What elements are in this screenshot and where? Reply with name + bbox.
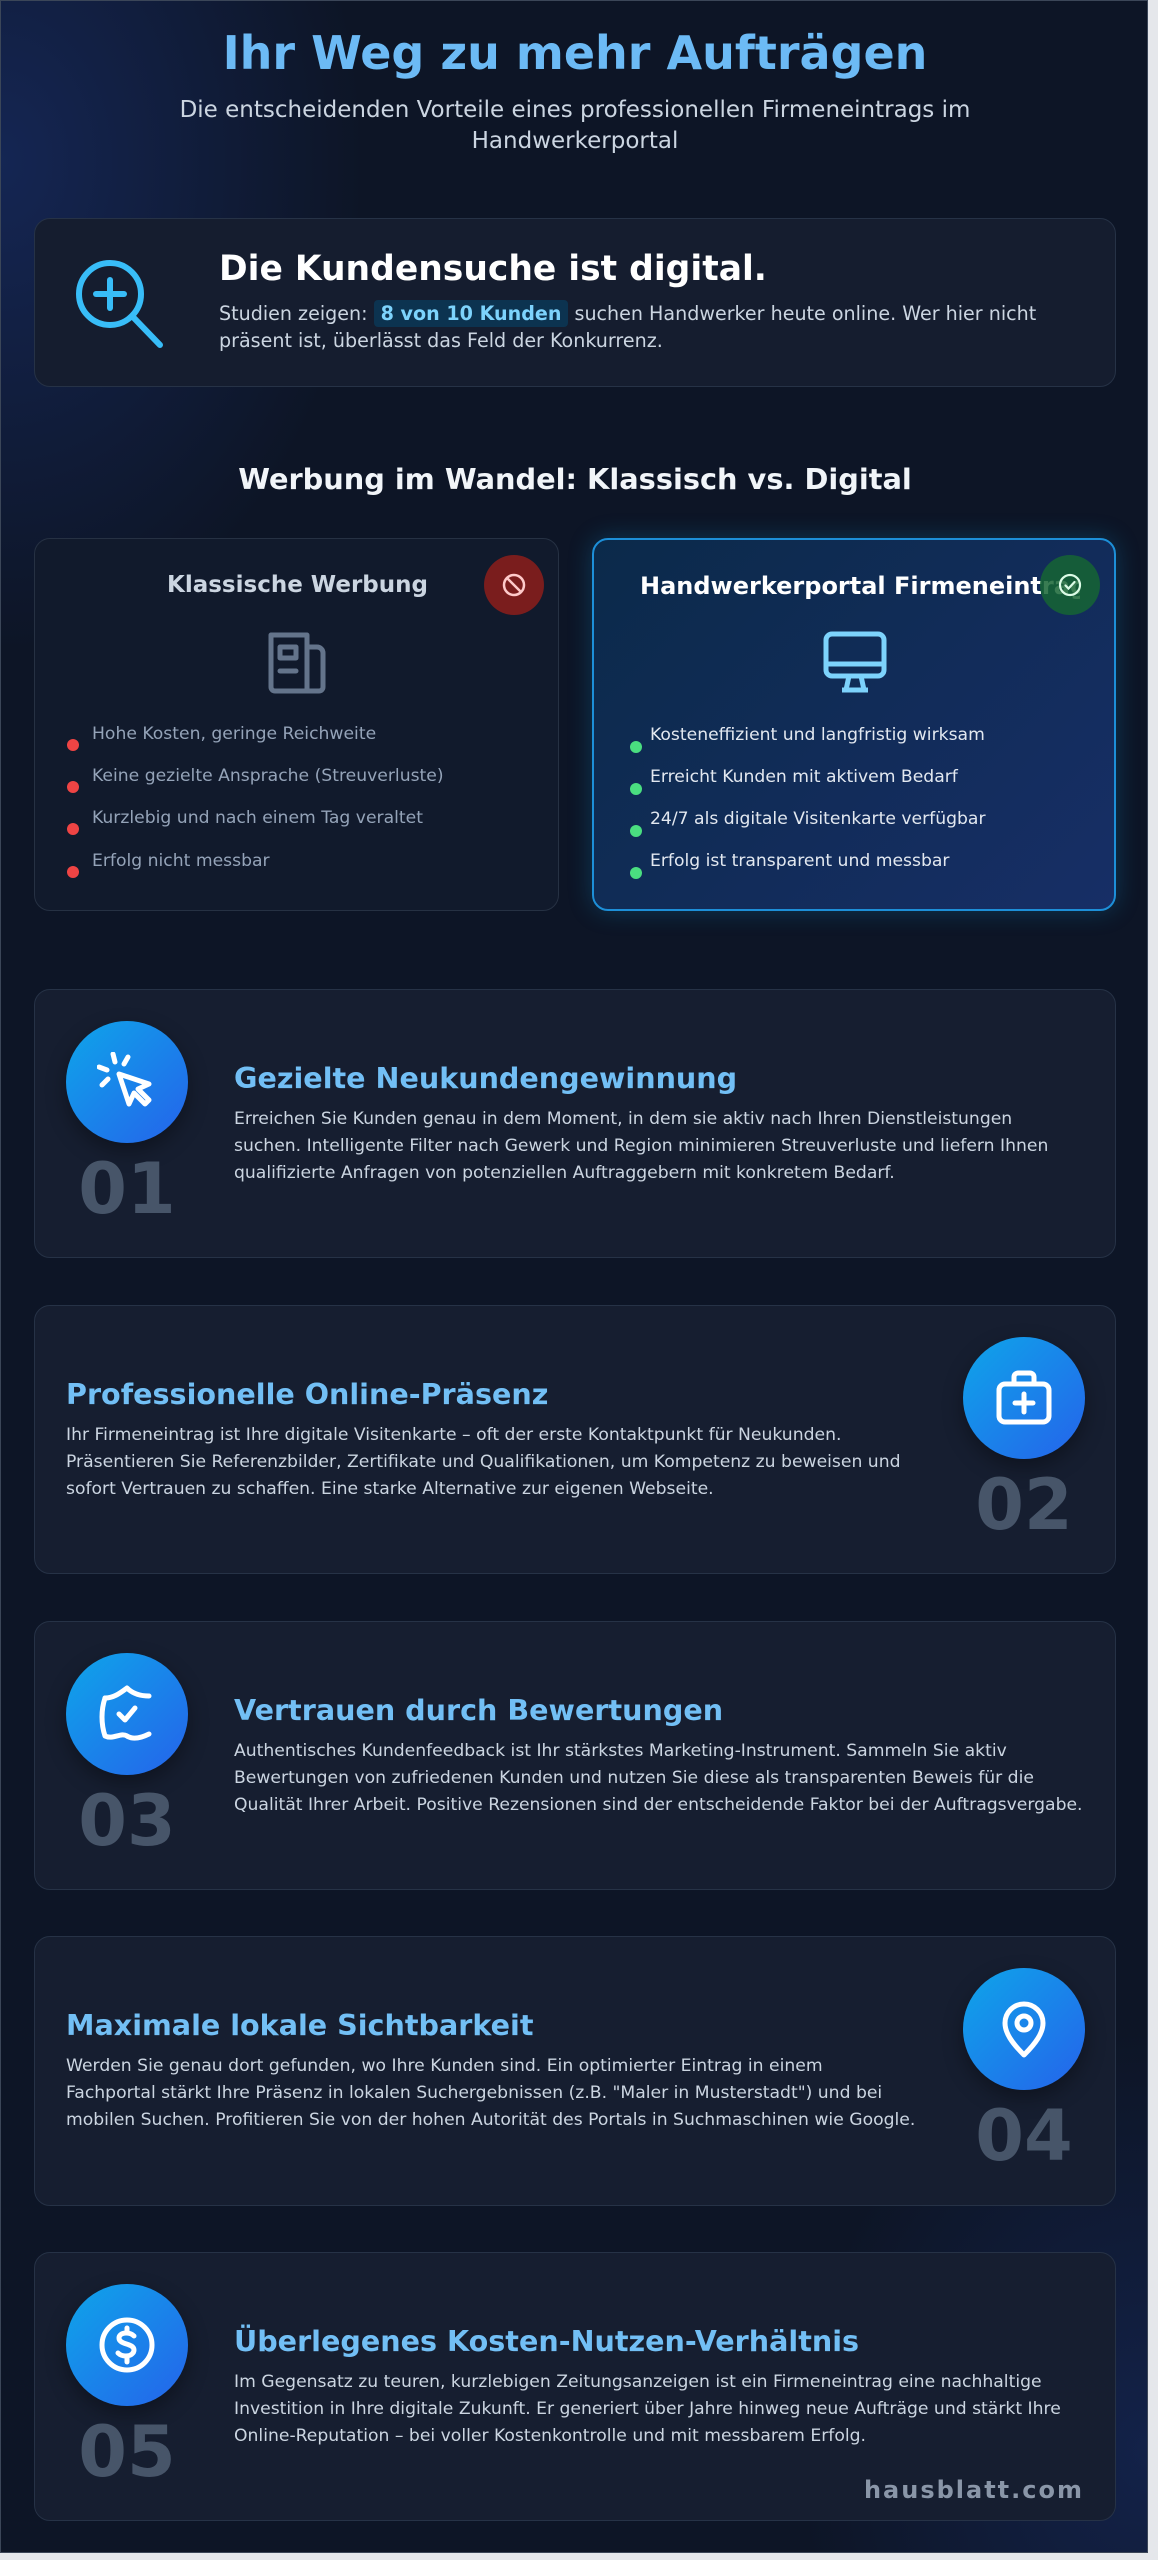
text [219, 300, 1036, 352]
number: 03 [78, 1780, 176, 1862]
body text: suchen. Intelligente Filter nach Gewerk und Region minimieren Streuverluste und liefern Ihnen [234, 1136, 1048, 1156]
body text: qualifizierte Anfragen von potenziellen Auftraggebern mit konkretem Bedarf. [234, 1163, 895, 1183]
bullet list: classic drawbacks [67, 724, 444, 878]
icon: monitor [824, 632, 886, 692]
body text: Online-Reputation – bei voller Kostenkontrolle und mit messbarem Erfolg. [234, 2426, 866, 2446]
body text: Fachportal stärkt Ihre Präsenz in lokalen Suchergebnissen (z.B. "Maler in Musterstadt") und bei [66, 2083, 882, 2103]
icon: map pin [963, 1968, 1085, 2090]
icon: click pointer [66, 1021, 188, 1143]
icon: newspaper [268, 632, 326, 694]
bullet list: portal benefits: 24/7 als digitale Visitenkarte verfügbar [650, 809, 986, 829]
bullet list: portal benefits [630, 725, 986, 879]
body text: Bewertungen von zufriedenen Kunden und nutzen Sie diese als transparenten Beweis für die [234, 1768, 1034, 1788]
text: Studien zeigen: 8 von 10 Kunden suchen Handwerker heute online. Wer hier nicht [219, 302, 1036, 325]
bullet list: portal benefits: Kosteneffizient und langfristig wirksam [650, 725, 985, 745]
body text [66, 2056, 915, 2130]
icon: coin [66, 2284, 188, 2406]
body text: Investition in Ihre digitale Zukunft. Er generiert über Jahre hinweg neue Aufträge und stärkt Ihre [234, 2399, 1061, 2419]
body text: Ihr Firmeneintrag ist Ihre digitale Visitenkarte – oft der erste Kontaktpunkt für Neukunden. [66, 1425, 841, 1445]
title: Ihr Weg zu mehr Aufträgen [223, 26, 927, 80]
bullet list: portal benefits: Erreicht Kunden mit aktivem Bedarf [650, 767, 958, 787]
icon: ban badge [484, 555, 544, 615]
bullet list: portal benefits: Erfolg ist transparent und messbar [650, 851, 949, 871]
number: 01 [78, 1148, 176, 1230]
subtitle: Die entscheidenden Vorteile eines professionellen Firmeneintrags im [180, 97, 970, 123]
body text [234, 2372, 1061, 2446]
panel: portal entry [592, 538, 1116, 911]
icon: magnifier plus [76, 260, 163, 348]
number: 05 [78, 2411, 176, 2493]
panel title: Klassische Werbung [167, 572, 428, 598]
body text [66, 1425, 901, 1499]
body text: sofort Vertrauen zu schaffen. Eine starke Alternative zur eigenen Webseite. [66, 1479, 714, 1499]
subtitle [180, 97, 970, 154]
bullet list: classic drawbacks: Hohe Kosten, geringe Reichweite [92, 724, 376, 744]
body text [234, 1109, 1048, 1183]
heading: Professionelle Online-Präsenz [66, 1377, 548, 1411]
icon: check badge [1040, 555, 1100, 615]
text: präsent ist, überlässt das Feld der Konkurrenz. [219, 329, 663, 352]
body text [234, 1741, 1083, 1815]
icon: shield check [66, 1653, 188, 1775]
body text: Präsentieren Sie Referenzbilder, Zertifikate und Qualifikationen, um Kompetenz zu beweisen und [66, 1452, 901, 1472]
bullet list: classic drawbacks: Keine gezielte Ansprache (Streuverluste) [92, 766, 444, 786]
body text: mobilen Suchen. Profitieren Sie von der hohen Autorität des Portals in Suchmaschinen wie Google. [66, 2110, 915, 2130]
heading: Die Kundensuche ist digital. [219, 249, 767, 289]
bullet list: classic drawbacks: Kurzlebig und nach einem Tag veraltet [92, 808, 423, 828]
panel: feature 01 [34, 989, 1116, 1258]
panel: digital search intro [34, 218, 1116, 387]
panel: feature 04 [34, 1936, 1116, 2206]
body text: Erreichen Sie Kunden genau in dem Moment, in dem sie aktiv nach Ihren Dienstleistungen [234, 1109, 1012, 1129]
panel: classic advertising [34, 538, 559, 911]
heading: Überlegenes Kosten-Nutzen-Verhältnis [234, 2324, 859, 2358]
bullet list: classic drawbacks: Erfolg nicht messbar [92, 851, 270, 871]
heading: Vertrauen durch Bewertungen [234, 1693, 723, 1727]
body text: Authentisches Kundenfeedback ist Ihr stärkstes Marketing-Instrument. Sammeln Sie aktiv [234, 1741, 1007, 1761]
panel: feature 03 [34, 1621, 1116, 1890]
body text: Qualität Ihrer Arbeit. Positive Rezensionen sind der entscheidende Faktor bei der Auftragsvergabe. [234, 1795, 1083, 1815]
body text: Werden Sie genau dort gefunden, wo Ihre Kunden sind. Ein optimierter Eintrag in einem [66, 2056, 823, 2076]
panel title: Handwerkerportal Firmeneintrag [640, 572, 1080, 600]
number: 04 [975, 2095, 1073, 2177]
icon: kit [963, 1337, 1085, 1459]
body text: Im Gegensatz zu teuren, kurzlebigen Zeitungsanzeigen ist ein Firmeneintrag eine nachhaltige [234, 2372, 1042, 2392]
panel: feature 05 [34, 2252, 1116, 2521]
watermark: hausblatt.com [864, 2476, 1084, 2504]
panel: feature 02 [34, 1305, 1116, 1574]
subtitle: Handwerkerportal [472, 128, 678, 154]
heading: Gezielte Neukundengewinnung [234, 1061, 737, 1095]
heading: Maximale lokale Sichtbarkeit [66, 2008, 533, 2042]
heading: comparison: Werbung im Wandel: Klassisch vs. Digital [238, 462, 912, 496]
number: 02 [975, 1464, 1073, 1546]
